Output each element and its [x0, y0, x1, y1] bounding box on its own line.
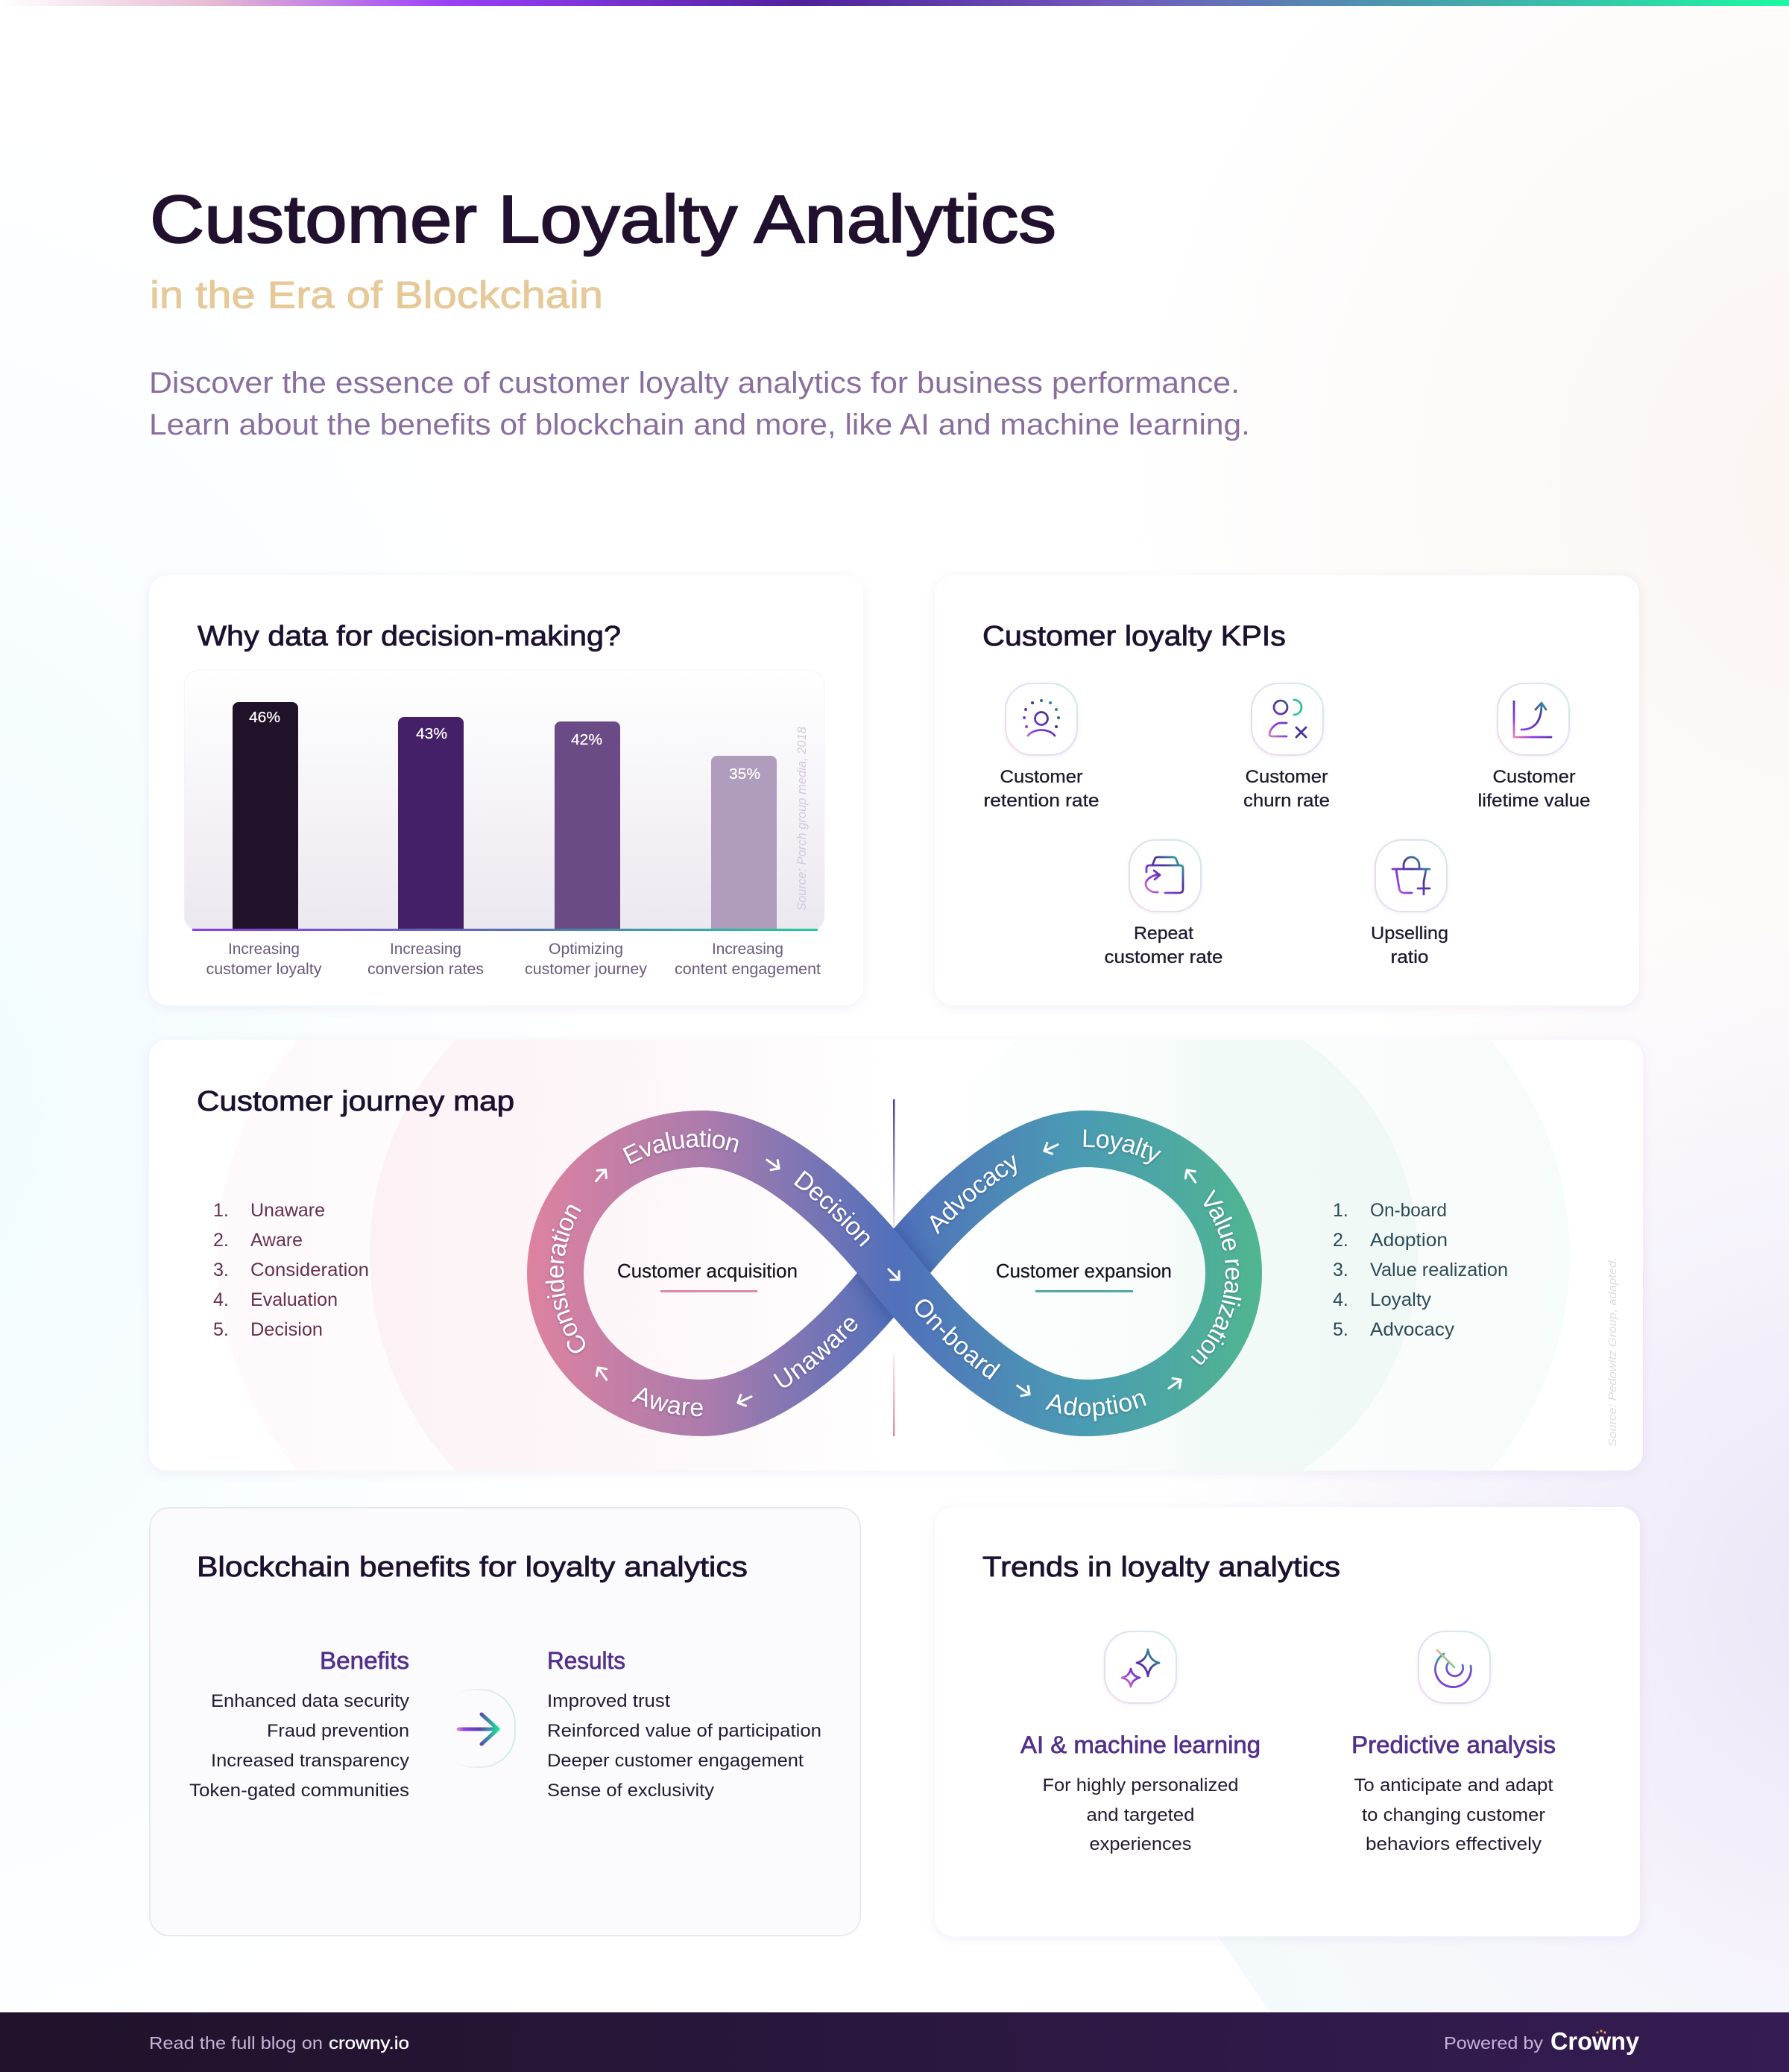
KPI: customer lifetime value: Customer: [1492, 767, 1576, 787]
bar labels: conversion rates: [367, 961, 484, 978]
ribbon labels: Loyalty: [1082, 1130, 1161, 1166]
powered by brand: Crowny: [1550, 2027, 1640, 2055]
panel: why data for decision-making: [149, 575, 863, 1005]
bar labels: customer journey: [525, 961, 647, 978]
list: expansion stages: On-board: [1370, 1200, 1447, 1221]
icon: basket plus: [1375, 840, 1447, 912]
powered by brand: Powered by: [1444, 2033, 1544, 2053]
bar labels: Increasing: [712, 941, 783, 958]
icon: growth chart: [1498, 683, 1569, 755]
list: expansion stages: [1333, 1200, 1508, 1340]
bar labels: [206, 941, 821, 978]
icon: churn: [1252, 683, 1323, 755]
ribbon labels: Value realization: [1190, 1189, 1242, 1366]
ribbon arrows: [591, 1140, 1200, 1408]
ribbon labels: Advocacy: [930, 1155, 1017, 1235]
bar labels: Increasing: [390, 941, 461, 958]
top gradient bar: [0, 0, 1789, 6]
list: expansion stages: 4.: [1333, 1289, 1348, 1310]
list: expansion stages: Loyalty: [1370, 1289, 1432, 1310]
panel: customer loyalty KPIs: [935, 575, 1639, 1005]
panel: blockchain benefits: [150, 1508, 860, 1936]
ribbon labels: On-board: [915, 1299, 1000, 1380]
trend: predictive analysis: to changing customer: [1362, 1805, 1545, 1825]
list: acquisition stages: 5.: [213, 1319, 229, 1340]
trend: predictive analysis: [1351, 1632, 1556, 1854]
label: customer expansion: [996, 1260, 1172, 1292]
KPI: repeat customer rate: Repeat: [1134, 923, 1193, 944]
heading: Trends in loyalty analytics: [982, 1552, 1340, 1583]
benefits column: Increased transparency: [211, 1751, 409, 1771]
KPI: customer lifetime value: [1477, 683, 1591, 811]
benefits column: Enhanced data security: [211, 1691, 409, 1711]
KPI: customer churn rate: churn rate: [1243, 791, 1330, 811]
panel: customer journey map: [149, 1040, 1643, 1473]
results column: Results: [547, 1647, 625, 1674]
KPI: upselling ratio: ratio: [1391, 947, 1428, 967]
bar: 35%: 35%: [729, 766, 760, 783]
list: acquisition stages: Evaluation: [250, 1289, 338, 1310]
bar labels: customer loyalty: [206, 961, 322, 978]
divider line: [893, 1099, 894, 1436]
ribbon labels: Decision: [793, 1170, 871, 1248]
bar: 35%: [711, 756, 777, 929]
bar labels: Increasing: [228, 941, 300, 958]
label: customer expansion: Customer expansion: [996, 1260, 1172, 1282]
heading: Why data for decision-making?: [198, 621, 621, 652]
list: acquisition stages: [213, 1200, 369, 1340]
bar: 46%: 46%: [249, 710, 280, 726]
source note: Source: Porch group media, 2018: [795, 726, 809, 911]
benefits column: Benefits: [320, 1647, 409, 1674]
trend: AI and machine learning: For highly personalized: [1042, 1775, 1239, 1795]
ribbon labels: [544, 1128, 1242, 1423]
bar labels: Optimizing: [549, 941, 623, 958]
list: acquisition stages: Decision: [250, 1319, 323, 1340]
description: [149, 367, 1250, 441]
ribbon labels: Unaware: [773, 1318, 858, 1389]
ribbon labels: Aware: [631, 1388, 704, 1418]
list: expansion stages: 1.: [1333, 1200, 1348, 1221]
KPI: customer lifetime value: lifetime value: [1477, 791, 1591, 811]
trend: predictive analysis: behaviors effectively: [1366, 1834, 1542, 1854]
benefits column: Fraud prevention: [267, 1721, 409, 1741]
bar: 42%: [555, 721, 620, 929]
list: expansion stages: 3.: [1333, 1260, 1348, 1280]
bar: 43%: 43%: [416, 726, 447, 742]
results column: [547, 1647, 821, 1801]
trend: AI and machine learning: AI & machine learning: [1020, 1731, 1260, 1758]
icon: person with dots: [1006, 683, 1077, 755]
KPI: customer retention rate: [984, 683, 1099, 811]
bar chart: [184, 670, 824, 931]
KPI: customer churn rate: [1243, 683, 1330, 811]
benefits column: Token-gated communities: [189, 1781, 409, 1801]
panel: trends in loyalty analytics: [935, 1507, 1640, 1936]
KPI: customer churn rate: Customer: [1245, 767, 1328, 787]
icon: sparkles: [1105, 1632, 1176, 1703]
powered by brand: [1444, 2027, 1640, 2055]
trend: predictive analysis: To anticipate and adapt: [1354, 1775, 1553, 1795]
infinity ribbon diagram: [527, 1111, 1262, 1436]
list: expansion stages: Adoption: [1370, 1230, 1448, 1251]
bar: 42%: 42%: [571, 732, 602, 748]
trend: predictive analysis: Predictive analysis: [1351, 1731, 1556, 1758]
label: customer acquisition: Customer acquisition: [617, 1260, 798, 1282]
KPI: customer retention rate: retention rate: [984, 791, 1099, 811]
list: acquisition stages: 4.: [213, 1289, 229, 1310]
list: expansion stages: 5.: [1333, 1319, 1348, 1340]
icon: spiral target: [1419, 1632, 1490, 1703]
icon: repeat bag: [1129, 840, 1201, 912]
source note: Source: Pedowitz Group, adapted.: [1606, 1257, 1619, 1447]
bar labels: content engagement: [675, 961, 821, 978]
bar: 46%: [233, 702, 298, 929]
list: acquisition stages: 1.: [213, 1200, 229, 1221]
header: [149, 183, 1250, 441]
footer: [0, 2012, 1789, 2072]
list: acquisition stages: Unaware: [250, 1200, 325, 1221]
subtitle: in the Era of Blockchain: [150, 274, 603, 316]
results column: Deeper customer engagement: [547, 1751, 804, 1771]
footer link: [149, 2033, 409, 2053]
results column: Improved trust: [547, 1691, 670, 1711]
ribbon labels: Evaluation: [622, 1128, 739, 1166]
heading: Blockchain benefits for loyalty analytics: [197, 1552, 748, 1583]
footer link: crowny.io: [329, 2033, 409, 2053]
trend: AI and machine learning: and targeted: [1087, 1805, 1194, 1825]
results column: Reinforced value of participation: [547, 1721, 821, 1741]
KPI: upselling ratio: [1371, 840, 1448, 967]
KPI: repeat customer rate: [1105, 840, 1222, 967]
ribbon labels: Adoption: [1045, 1393, 1146, 1423]
list: expansion stages: 2.: [1333, 1230, 1348, 1251]
ribbon labels: Consideration: [544, 1204, 586, 1355]
axis line: [192, 929, 818, 931]
description: Discover the essence of customer loyalty analytics for business performance.: [149, 367, 1240, 399]
list: acquisition stages: Aware: [250, 1230, 303, 1251]
list: acquisition stages: Consideration: [250, 1260, 369, 1280]
trend: AI and machine learning: [1020, 1632, 1260, 1854]
list: expansion stages: Value realization: [1370, 1260, 1508, 1280]
bar: 43%: [398, 717, 464, 929]
list: acquisition stages: 2.: [213, 1230, 229, 1251]
heading: Customer loyalty KPIs: [982, 621, 1286, 652]
footer link: Read the full blog on: [149, 2033, 323, 2053]
KPI: customer retention rate: Customer: [1000, 767, 1083, 787]
KPI: upselling ratio: Upselling: [1371, 923, 1448, 944]
icon: arrow: [439, 1690, 515, 1767]
title: Customer Loyalty Analytics: [150, 183, 1056, 257]
list: acquisition stages: 3.: [213, 1260, 229, 1280]
list: expansion stages: Advocacy: [1370, 1319, 1455, 1340]
label: customer acquisition: [617, 1260, 798, 1292]
results column: Sense of exclusivity: [547, 1781, 714, 1801]
description: Learn about the benefits of blockchain and more, like AI and machine learning.: [149, 408, 1250, 441]
KPI: repeat customer rate: customer rate: [1105, 947, 1222, 967]
benefits column: [189, 1647, 409, 1801]
heading: Customer journey map: [197, 1086, 514, 1117]
trend: AI and machine learning: experiences: [1090, 1834, 1191, 1854]
